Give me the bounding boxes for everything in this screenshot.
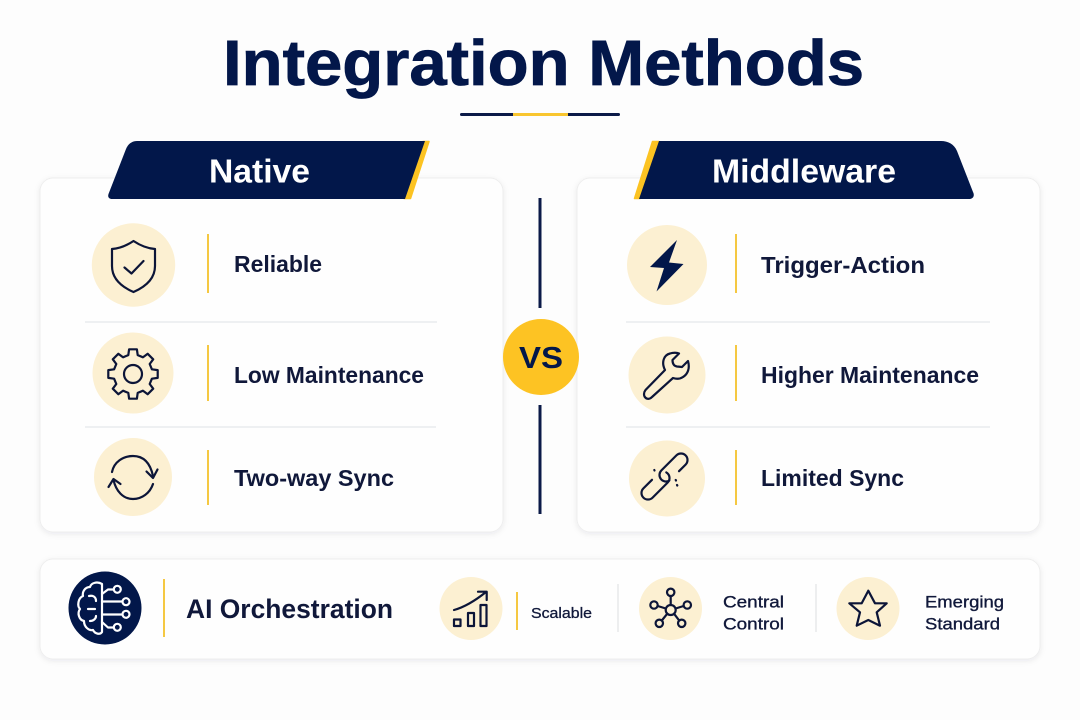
panel card: middleware	[577, 178, 1040, 532]
row: low maintenance	[92, 332, 424, 414]
title: Integration Methods	[223, 27, 864, 99]
vs divider	[503, 198, 579, 514]
icon: sync arrows	[94, 438, 172, 516]
row: reliable: Reliable	[234, 251, 322, 277]
panel: middleware	[577, 141, 1040, 532]
row: low maintenance: Low Maintenance	[234, 362, 424, 388]
item: emerging standard: Standard	[925, 614, 1000, 634]
item: scalable	[440, 577, 592, 640]
panel: ai orchestration	[40, 559, 1040, 659]
item: emerging standard	[836, 577, 1004, 640]
native header tab: Native	[209, 152, 310, 190]
title underline	[460, 113, 620, 116]
middleware header tab: Middleware	[712, 152, 896, 190]
row: two-way sync	[94, 438, 394, 516]
icon: wrench	[628, 336, 706, 414]
row: higher maintenance: Higher Maintenance	[761, 362, 979, 388]
row: limited sync	[629, 440, 904, 516]
row: limited sync: Limited Sync	[761, 465, 904, 491]
panel card: native	[40, 178, 503, 532]
panel card: ai orchestration	[40, 559, 1040, 659]
icon: broken chain link	[629, 440, 705, 516]
heading: ai orchestration: AI Orchestration	[186, 594, 393, 624]
native header tab	[108, 141, 429, 199]
middleware header tab	[634, 141, 974, 199]
row: trigger-action	[627, 225, 925, 305]
item: scalable: Scalable	[531, 605, 592, 622]
item: emerging standard: Emerging	[925, 592, 1004, 612]
icon: shield check	[92, 223, 175, 307]
item: central control: Control	[723, 614, 784, 634]
row: higher maintenance	[628, 336, 979, 414]
icon: lightning bolt	[627, 225, 707, 305]
icon: hub network	[639, 577, 702, 640]
vs divider: VS	[519, 340, 563, 375]
row: reliable	[92, 223, 322, 307]
icon: growth chart	[440, 577, 502, 640]
icon: star	[836, 577, 900, 640]
row: trigger-action: Trigger-Action	[761, 252, 925, 278]
item: central control: Central	[723, 592, 784, 612]
icon: gear	[92, 332, 174, 414]
icon: ai brain	[68, 572, 142, 644]
panel: native	[40, 141, 503, 532]
item: central control	[639, 577, 784, 640]
row: two-way sync: Two-way Sync	[234, 465, 394, 491]
